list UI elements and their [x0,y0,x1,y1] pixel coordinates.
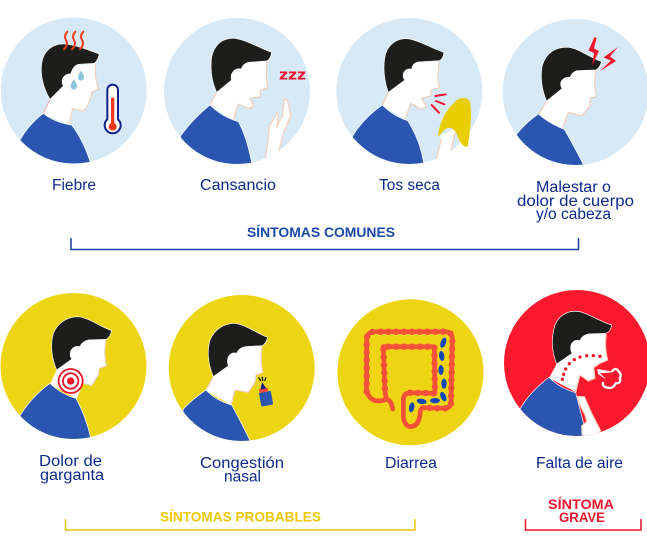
heading: sintoma grave: SÍNTOMA [548,496,614,512]
label: dolor de garganta [39,453,104,484]
circle background [504,290,647,436]
heading: sintoma grave: GRAVE [559,509,605,525]
circle background [503,19,647,165]
person with headache [516,47,602,165]
circle background [336,18,482,164]
bracket: grave [526,519,641,530]
person with fever [20,44,99,173]
panel: tos seca [336,18,482,194]
icon: throat target [59,369,83,393]
label: malestar: Malestar o [536,179,611,196]
person coughing [352,38,456,164]
label: fiebre: Fiebre [52,177,96,194]
circle background [1,18,147,164]
panel: fiebre [1,18,147,194]
panel: malestar [503,19,647,223]
icon: cough lines [432,94,446,113]
label: dolor de garganta: Dolor de [39,453,102,470]
label: congestion nasal: nasal [224,468,261,486]
bracket: probables [66,519,415,530]
label: malestar: y/o cabeza [536,206,611,223]
icon: zzz: zzz [279,68,306,84]
circle background [338,299,484,445]
panel: falta de aire [504,290,647,472]
panel: dolor de garganta [0,293,146,484]
panel: congestion nasal [169,295,315,486]
icon: thermometer [105,85,121,133]
icon: yellow handkerchief [438,98,471,147]
heading: sintomas probables: SÍNTOMAS PROBABLES [160,508,321,524]
person with sore throat [20,316,112,439]
person with nasal spray [182,323,268,441]
circle background [164,18,310,164]
label: congestion nasal: Congestión [200,455,284,472]
circle background [169,295,315,441]
icon: blue stool segments [408,337,448,413]
icon: breath cloud [598,369,621,388]
person short of breath [515,311,612,442]
icon: pain bolts [588,37,618,71]
label: dolor de garganta: garganta [40,467,104,484]
bracket: comunes [71,238,578,250]
heading: sintomas comunes: SÍNTOMAS COMUNES [247,224,395,240]
label: falta de aire: Falta de aire [536,455,623,472]
icon: nasal spray [257,377,273,407]
icon: intestine [366,332,452,427]
person yawning [180,38,292,164]
label: tos seca: Tos seca [379,177,440,194]
label: diarrea: Diarrea [385,455,437,472]
label: cansancio: Cansancio [200,177,276,194]
panel: cansancio [164,18,310,194]
heading: sintoma grave [548,496,614,525]
icon: airway dots [561,354,602,381]
label: congestion nasal [200,455,284,486]
label: malestar: dolor de cuerpo [517,193,634,210]
circle background [0,293,146,439]
icon: sweat drops [71,71,84,89]
label: malestar [517,179,634,223]
icon: heat waves [64,32,83,49]
panel: diarrea [338,299,484,472]
